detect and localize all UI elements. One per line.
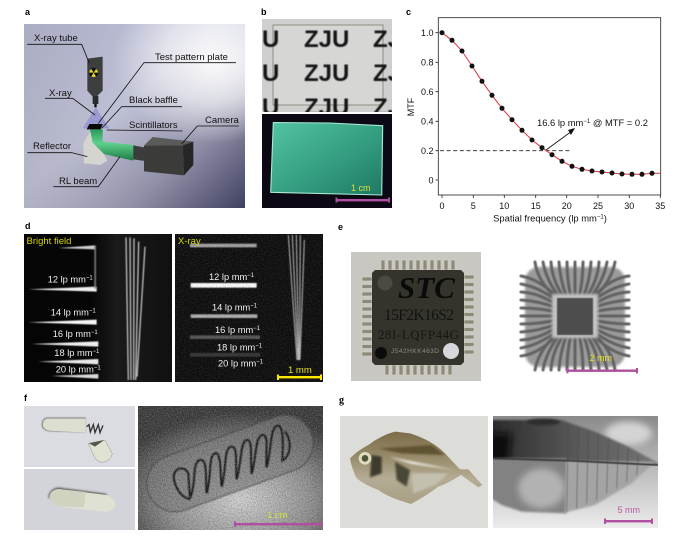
frequency labels: 20 lp mm bbox=[56, 365, 94, 375]
fish tail body bbox=[565, 462, 655, 513]
scale bar: 2 mm bbox=[566, 368, 638, 373]
y axis labels: 0.4 bbox=[421, 117, 434, 127]
frequency labels: 16 lp mm bbox=[215, 325, 253, 335]
image: capsule X-ray bbox=[138, 406, 323, 530]
frequency labels: −1 bbox=[250, 304, 258, 310]
panel g: fish images bbox=[339, 395, 660, 528]
die frame bbox=[552, 294, 598, 338]
frequency labels: −1 bbox=[93, 349, 100, 355]
photo: opened capsule bbox=[24, 406, 135, 467]
photo: test pattern plate: ZJU bbox=[304, 60, 349, 87]
scale bar: 1 mm bbox=[277, 365, 322, 380]
frequency labels: 18 lp mm bbox=[217, 343, 255, 353]
heading: d: d bbox=[25, 221, 30, 231]
photo: test pattern plate: ZJU bbox=[234, 60, 279, 87]
annotation: @ MTF = 0.2 bbox=[590, 117, 648, 128]
heading: e: e bbox=[338, 222, 343, 232]
panel c: MTF chart bbox=[406, 7, 665, 224]
photo: test pattern plate: ZJU bbox=[304, 94, 349, 121]
fish abdomen bbox=[488, 458, 567, 513]
x axis labels: 20 bbox=[562, 201, 572, 211]
fish markings bbox=[370, 445, 455, 493]
scale bar: 1 cm bbox=[336, 183, 390, 202]
icon: RL beam bbox=[90, 129, 145, 161]
icon: camera bbox=[144, 137, 193, 175]
scale bar: 1 mm: 1 mm bbox=[288, 365, 312, 376]
axis ticks bbox=[436, 33, 660, 198]
frequency labels: 12 lp mm bbox=[209, 272, 247, 282]
heading: a: a bbox=[25, 7, 31, 17]
icon: reflector bbox=[83, 131, 107, 165]
y axis labels: 0 bbox=[428, 175, 434, 185]
label: black baffle: Black baffle bbox=[129, 95, 178, 106]
y axis labels: 0.6 bbox=[421, 87, 434, 97]
scale bar: 1 cm: 1 cm bbox=[351, 183, 371, 193]
fish dark top patch bbox=[527, 419, 560, 425]
panel e: chip images bbox=[338, 222, 638, 381]
image: fish X-ray bbox=[488, 416, 660, 528]
x axis title: −1 bbox=[597, 214, 604, 220]
background glow bbox=[605, 422, 652, 445]
x axis labels: 5 bbox=[471, 201, 476, 211]
label: reflector: Reflector bbox=[33, 141, 71, 152]
photo: closed capsule bbox=[24, 469, 135, 530]
chart frame bbox=[438, 18, 661, 195]
chip pins bbox=[362, 260, 474, 375]
photo: test pattern plate: ZJU bbox=[373, 26, 418, 53]
frequency labels: 18 lp mm bbox=[54, 348, 93, 358]
x axis labels: 25 bbox=[593, 201, 603, 211]
annotation: −1 bbox=[583, 119, 591, 125]
photo: test pattern plate: ZJU bbox=[234, 94, 279, 121]
frequency labels: 20 lp mm bbox=[218, 359, 256, 369]
frequency labels: −1 bbox=[256, 360, 264, 366]
frequency labels: −1 bbox=[91, 330, 98, 336]
X-ray line fan bbox=[288, 235, 304, 360]
photo: chip: 15F2K16S2 bbox=[384, 307, 454, 324]
label: test pattern plate: Test pattern plate bbox=[155, 52, 228, 63]
X-ray leads bbox=[521, 262, 629, 370]
y axis title: MTF bbox=[406, 97, 416, 116]
x axis labels: 15 bbox=[531, 201, 541, 211]
x axis title: Spatial frequency (lp mm bbox=[493, 212, 597, 224]
capsule outline bbox=[146, 415, 314, 513]
label: RL beam: RL beam bbox=[59, 176, 97, 187]
ribs bbox=[567, 425, 638, 512]
labels bbox=[33, 33, 240, 187]
annotation: 16.6 lp mm bbox=[537, 117, 583, 128]
y axis labels: 0.8 bbox=[421, 58, 434, 68]
heading: g: g bbox=[339, 395, 344, 406]
frequency labels: 14 lp mm bbox=[212, 303, 250, 313]
panel b: scintillator photos bbox=[262, 8, 392, 208]
bright field bars bbox=[28, 245, 98, 379]
frequency labels: −1 bbox=[255, 344, 263, 350]
x axis title: ) bbox=[604, 212, 607, 224]
scale label: 2 mm: 2 mm bbox=[590, 353, 612, 363]
image: X-ray bbox=[175, 234, 323, 382]
fish dorsal body bbox=[492, 420, 660, 464]
heading: f: f bbox=[24, 393, 28, 403]
photo: chip bbox=[351, 252, 481, 381]
label: camera: Camera bbox=[205, 115, 240, 126]
y axis labels: 1.0 bbox=[421, 28, 434, 38]
y axis labels: 0.2 bbox=[421, 146, 434, 156]
frequency labels: 14 lp mm bbox=[51, 308, 89, 318]
scale bar: 1 cm bbox=[234, 522, 322, 527]
image: chip X-ray bbox=[521, 262, 638, 373]
photo: chip: STC bbox=[398, 270, 455, 305]
chip body bbox=[372, 270, 464, 365]
x axis labels: 35 bbox=[655, 201, 665, 211]
icon: X-ray tube bbox=[87, 57, 103, 107]
frequency labels: −1 bbox=[86, 276, 93, 282]
x axis labels bbox=[439, 201, 665, 211]
photo: test pattern plate: ZJU bbox=[373, 94, 418, 121]
data points bbox=[440, 30, 654, 177]
label: scintillators: Scintillators bbox=[129, 120, 178, 131]
scale label: 1 cm: 1 cm bbox=[267, 510, 288, 521]
frequency labels: −1 bbox=[253, 326, 261, 332]
frequency labels: 12 lp mm bbox=[48, 274, 86, 284]
icon: black baffle bbox=[87, 124, 103, 129]
photo: fish bbox=[340, 416, 488, 528]
x axis labels: 30 bbox=[624, 201, 634, 211]
chip markings bbox=[378, 276, 392, 290]
drawing: X-ray apparatus bbox=[27, 44, 239, 187]
panel a: setup schematic bbox=[24, 7, 245, 208]
image: bright field bbox=[24, 234, 172, 382]
X-ray cone bbox=[83, 107, 109, 128]
frequency labels: 16 lp mm bbox=[53, 329, 91, 339]
fitted red curve bbox=[442, 33, 660, 174]
photo: test pattern plate: ZJU bbox=[304, 26, 349, 53]
fish body bbox=[350, 432, 482, 504]
photo: test pattern plate: ZJU bbox=[234, 26, 279, 53]
photo: chip: J542HKK463D bbox=[391, 348, 439, 355]
frequency labels bbox=[209, 272, 264, 369]
photo: chip: 28I-LQFP44G bbox=[378, 327, 459, 342]
x axis labels: 10 bbox=[499, 201, 509, 211]
x axis labels: 0 bbox=[439, 201, 445, 211]
schematic background bbox=[24, 24, 245, 208]
bright field label: Bright field bbox=[26, 236, 71, 247]
leader lines bbox=[27, 44, 239, 187]
scale label: 5 mm: 5 mm bbox=[618, 505, 640, 515]
frequency labels: −1 bbox=[247, 273, 255, 279]
label: X-ray tube: X-ray tube bbox=[34, 33, 78, 44]
heading: c: c bbox=[406, 7, 411, 17]
arrow bbox=[546, 128, 575, 150]
frequency labels: −1 bbox=[94, 366, 101, 372]
fish organs bbox=[518, 468, 565, 508]
die bbox=[557, 298, 593, 335]
frequency labels bbox=[48, 274, 101, 375]
heading: b: b bbox=[261, 7, 267, 17]
label: X-ray: X-ray bbox=[49, 88, 72, 99]
panel f: capsule images bbox=[24, 393, 323, 530]
fish eye bbox=[359, 452, 371, 465]
photo: test pattern plate bbox=[262, 19, 392, 112]
photo: luminescent scintillator bbox=[262, 114, 392, 208]
spine bbox=[493, 458, 658, 465]
y axis labels bbox=[421, 28, 434, 185]
scale bar: 5 mm bbox=[604, 518, 653, 524]
spring bbox=[174, 426, 290, 499]
line chart: MTF vs spatial frequency bbox=[406, 18, 665, 224]
dashed threshold line bbox=[440, 150, 571, 152]
X-ray label: X-ray bbox=[178, 236, 201, 247]
photo: test pattern plate: ZJU bbox=[373, 60, 418, 87]
frequency labels: −1 bbox=[89, 309, 96, 315]
bright field line fan bbox=[126, 237, 145, 380]
panel d: resolution images bbox=[24, 221, 323, 382]
fish head bbox=[493, 430, 514, 460]
X-ray bars bbox=[190, 244, 260, 357]
